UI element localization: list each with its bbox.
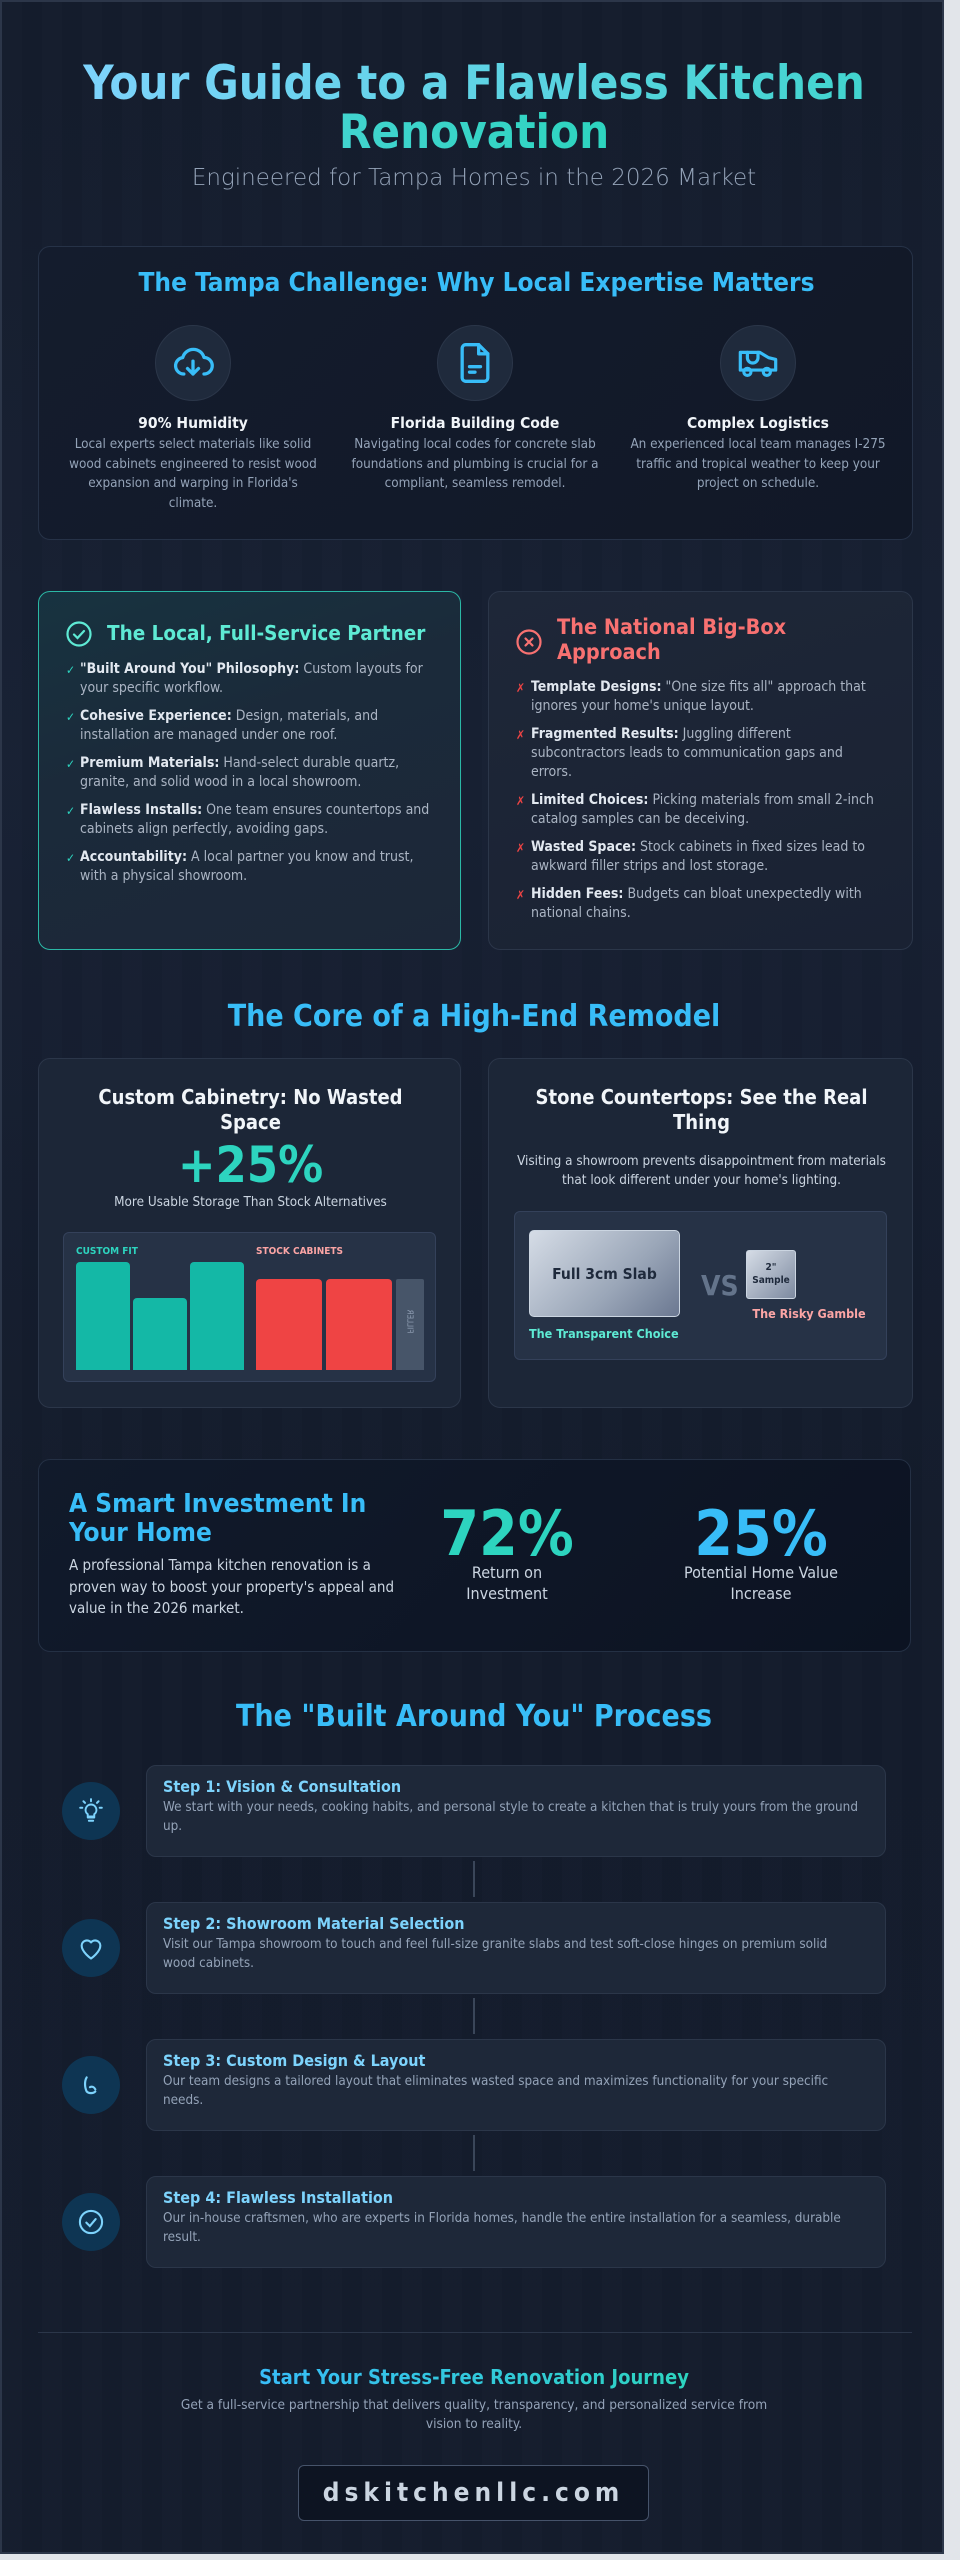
comparison: slab vs sample: The Risky Gamble: [752, 1306, 866, 1321]
list: big box drawbacks: Fragmented Results: Juggling different subcontractors leads to communication gaps and errors.: [531, 726, 843, 780]
icon: heart: [62, 1919, 120, 1977]
bar chart: custom vs stock: FILLER: [406, 1310, 414, 1333]
step 2: Visit our Tampa showroom to touch and feel full-size granite slabs and test soft-close hinges on premium solid wood cabinets.: [163, 1937, 827, 1971]
stat: 72%: 72%: [440, 1497, 574, 1570]
column: humidity: 90% Humidity: [138, 414, 248, 432]
comparison: slab vs sample: Sample: [752, 1275, 790, 1286]
column: logistics: Complex Logistics: [687, 414, 829, 432]
button: website: [298, 2465, 649, 2521]
step 3: Our team designs a tailored layout that eliminates wasted space and maximizes functionality for your specific needs.: [163, 2074, 828, 2108]
list: local benefits: ✓: [66, 851, 75, 865]
column: building code: Florida Building Code: [391, 414, 559, 432]
list: local benefits: ✓: [66, 663, 75, 677]
icon: document: [437, 325, 513, 401]
stat: 25%: Potential Home Value: [684, 1563, 838, 1582]
list: big box drawbacks: Hidden Fees: Budgets can bloat unexpectedly with national chains.: [531, 886, 862, 921]
column: logistics: An experienced local team manages I-275 traffic and tropical weather to keep your project on schedule.: [630, 437, 886, 491]
column: logistics: [630, 325, 886, 491]
icon: check circle: [66, 621, 92, 647]
step 1: We start with your needs, cooking habits, and personal style to create a kitchen that is truly yours from the ground up.: [163, 1800, 858, 1834]
list: local benefits: Flawless Installs: One team ensures countertops and cabinets align perfectly, avoiding gaps.: [80, 802, 429, 837]
list: local benefits: ✓: [66, 757, 75, 771]
list: big box drawbacks: Template Designs: "One size fits all" approach that ignores your home's unique layout.: [531, 679, 866, 714]
list: big box drawbacks: Limited Choices: Picking materials from small 2-inch catalog samples can be deceiving.: [531, 792, 874, 827]
column: building code: [351, 325, 598, 491]
panel: smart investment: [38, 1459, 911, 1652]
step 3: [62, 2039, 886, 2131]
subtitle: Engineered for Tampa Homes in the 2026 Market: [192, 165, 756, 191]
heading: tampa challenge: The Tampa Challenge: Why Local Expertise Matters: [138, 268, 815, 298]
list: big box drawbacks: ✗: [516, 681, 525, 695]
list: big box drawbacks: [516, 679, 874, 921]
comparison: slab vs sample: Full 3cm Slab: [552, 1264, 657, 1282]
icon: x circle: [516, 629, 542, 655]
list: local benefits: Premium Materials: Hand-select durable quartz, granite, and solid wood in a local showroom.: [80, 755, 399, 790]
comparison: slab vs sample: VS: [701, 1269, 739, 1302]
panel: custom cabinetry: [38, 1058, 461, 1408]
bar chart: custom vs stock: CUSTOM FIT: [76, 1246, 138, 1257]
panel: big box: [488, 591, 913, 950]
panel: local partner: [38, 591, 461, 950]
title: [83, 56, 865, 160]
list: local benefits: "Built Around You" Philosophy: Custom layouts for your specific workflow.: [80, 661, 423, 696]
heading: core of remodel: The Core of a High-End Remodel: [228, 999, 720, 1034]
step 1: [62, 1765, 886, 1857]
bar chart: custom vs stock: [63, 1232, 436, 1382]
step 4: [62, 2176, 886, 2268]
list: local benefits: Accountability: A local partner you know and trust, with a physical showroom.: [80, 849, 413, 884]
heading: investment: A Smart Investment In Your Home: [69, 1489, 366, 1548]
stat caption: More Usable Storage Than Stock Alternatives: [114, 1195, 387, 1210]
comparison: slab vs sample: [514, 1211, 887, 1360]
icon: design hand: [62, 2056, 120, 2114]
list: local benefits: Cohesive Experience: Design, materials, and installation are managed under one roof.: [80, 708, 378, 743]
footer text: Get a full-service partnership that delivers quality, transparency, and personalized service from vision to reality.: [181, 2397, 767, 2432]
text: showroom: Visiting a showroom prevents disappointment from materials that look different under your home's lighting.: [517, 1154, 886, 1188]
panel: stone countertops: [488, 1058, 913, 1408]
step 4: Step 4: Flawless Installation: [163, 2188, 393, 2207]
button: website: dskitchenllc.com: [323, 2478, 624, 2508]
panel: tampa challenge: [38, 246, 913, 540]
list: big box drawbacks: ✗: [516, 841, 525, 855]
heading: big box: The National Big-Box Approach: [557, 615, 786, 665]
text: investment: A professional Tampa kitchen renovation is a proven way to boost your property's appeal and value in the 2026 market.: [69, 1556, 394, 1617]
stat: 25%: [684, 1497, 838, 1603]
step 2: [62, 1902, 886, 1994]
heading: cabinetry: Custom Cabinetry: No Wasted Space: [98, 1085, 403, 1134]
step 4: Our in-house craftsmen, who are experts in Florida homes, handle the entire installation for a seamless, durable result.: [163, 2211, 841, 2245]
step 1: Step 1: Vision & Consultation: [163, 1777, 401, 1796]
step 2: Step 2: Showroom Material Selection: [163, 1914, 464, 1933]
icon: check circle: [62, 2193, 120, 2251]
bar chart: custom vs stock: STOCK CABINETS: [256, 1246, 343, 1257]
list: big box drawbacks: ✗: [516, 794, 525, 808]
icon: lightbulb: [62, 1782, 120, 1840]
list: local benefits: [66, 661, 429, 884]
comparison: slab vs sample: The Transparent Choice: [529, 1326, 679, 1341]
list: local benefits: ✓: [66, 804, 75, 818]
column: humidity: Local experts select materials like solid wood cabinets engineered to resist wood expansion and warping in Florida's climate.: [69, 437, 317, 510]
heading: local partner: The Local, Full-Service Partner: [107, 621, 425, 645]
stat: 72%: Investment: [466, 1584, 548, 1603]
list: local benefits: ✓: [66, 710, 75, 724]
stat: 72%: Return on: [472, 1563, 542, 1582]
heading: countertops: Stone Countertops: See the Real Thing: [536, 1085, 867, 1134]
icon: cloud download: [155, 325, 231, 401]
stat: 25%: 25%: [694, 1497, 828, 1570]
stat: 25%: Increase: [731, 1584, 791, 1603]
list: big box drawbacks: ✗: [516, 728, 525, 742]
stat: +25%: +25%: [178, 1136, 323, 1194]
heading: process: The "Built Around You" Process: [236, 1699, 712, 1734]
stat: 72%: [440, 1497, 574, 1603]
icon: van: [720, 325, 796, 401]
column: humidity: [69, 325, 317, 510]
title: Renovation: [339, 105, 609, 160]
column: building code: Navigating local codes for concrete slab foundations and plumbing is crucial for a compliant, seamless remodel.: [351, 437, 598, 491]
list: big box drawbacks: ✗: [516, 888, 525, 902]
footer heading: Start Your Stress-Free Renovation Journey: [259, 2365, 689, 2389]
step 3: Step 3: Custom Design & Layout: [163, 2051, 425, 2070]
title: Your Guide to a Flawless Kitchen: [83, 56, 865, 111]
list: big box drawbacks: Wasted Space: Stock cabinets in fixed sizes lead to awkward filler strips and lost storage.: [531, 839, 865, 874]
comparison: slab vs sample: 2": [766, 1262, 776, 1273]
